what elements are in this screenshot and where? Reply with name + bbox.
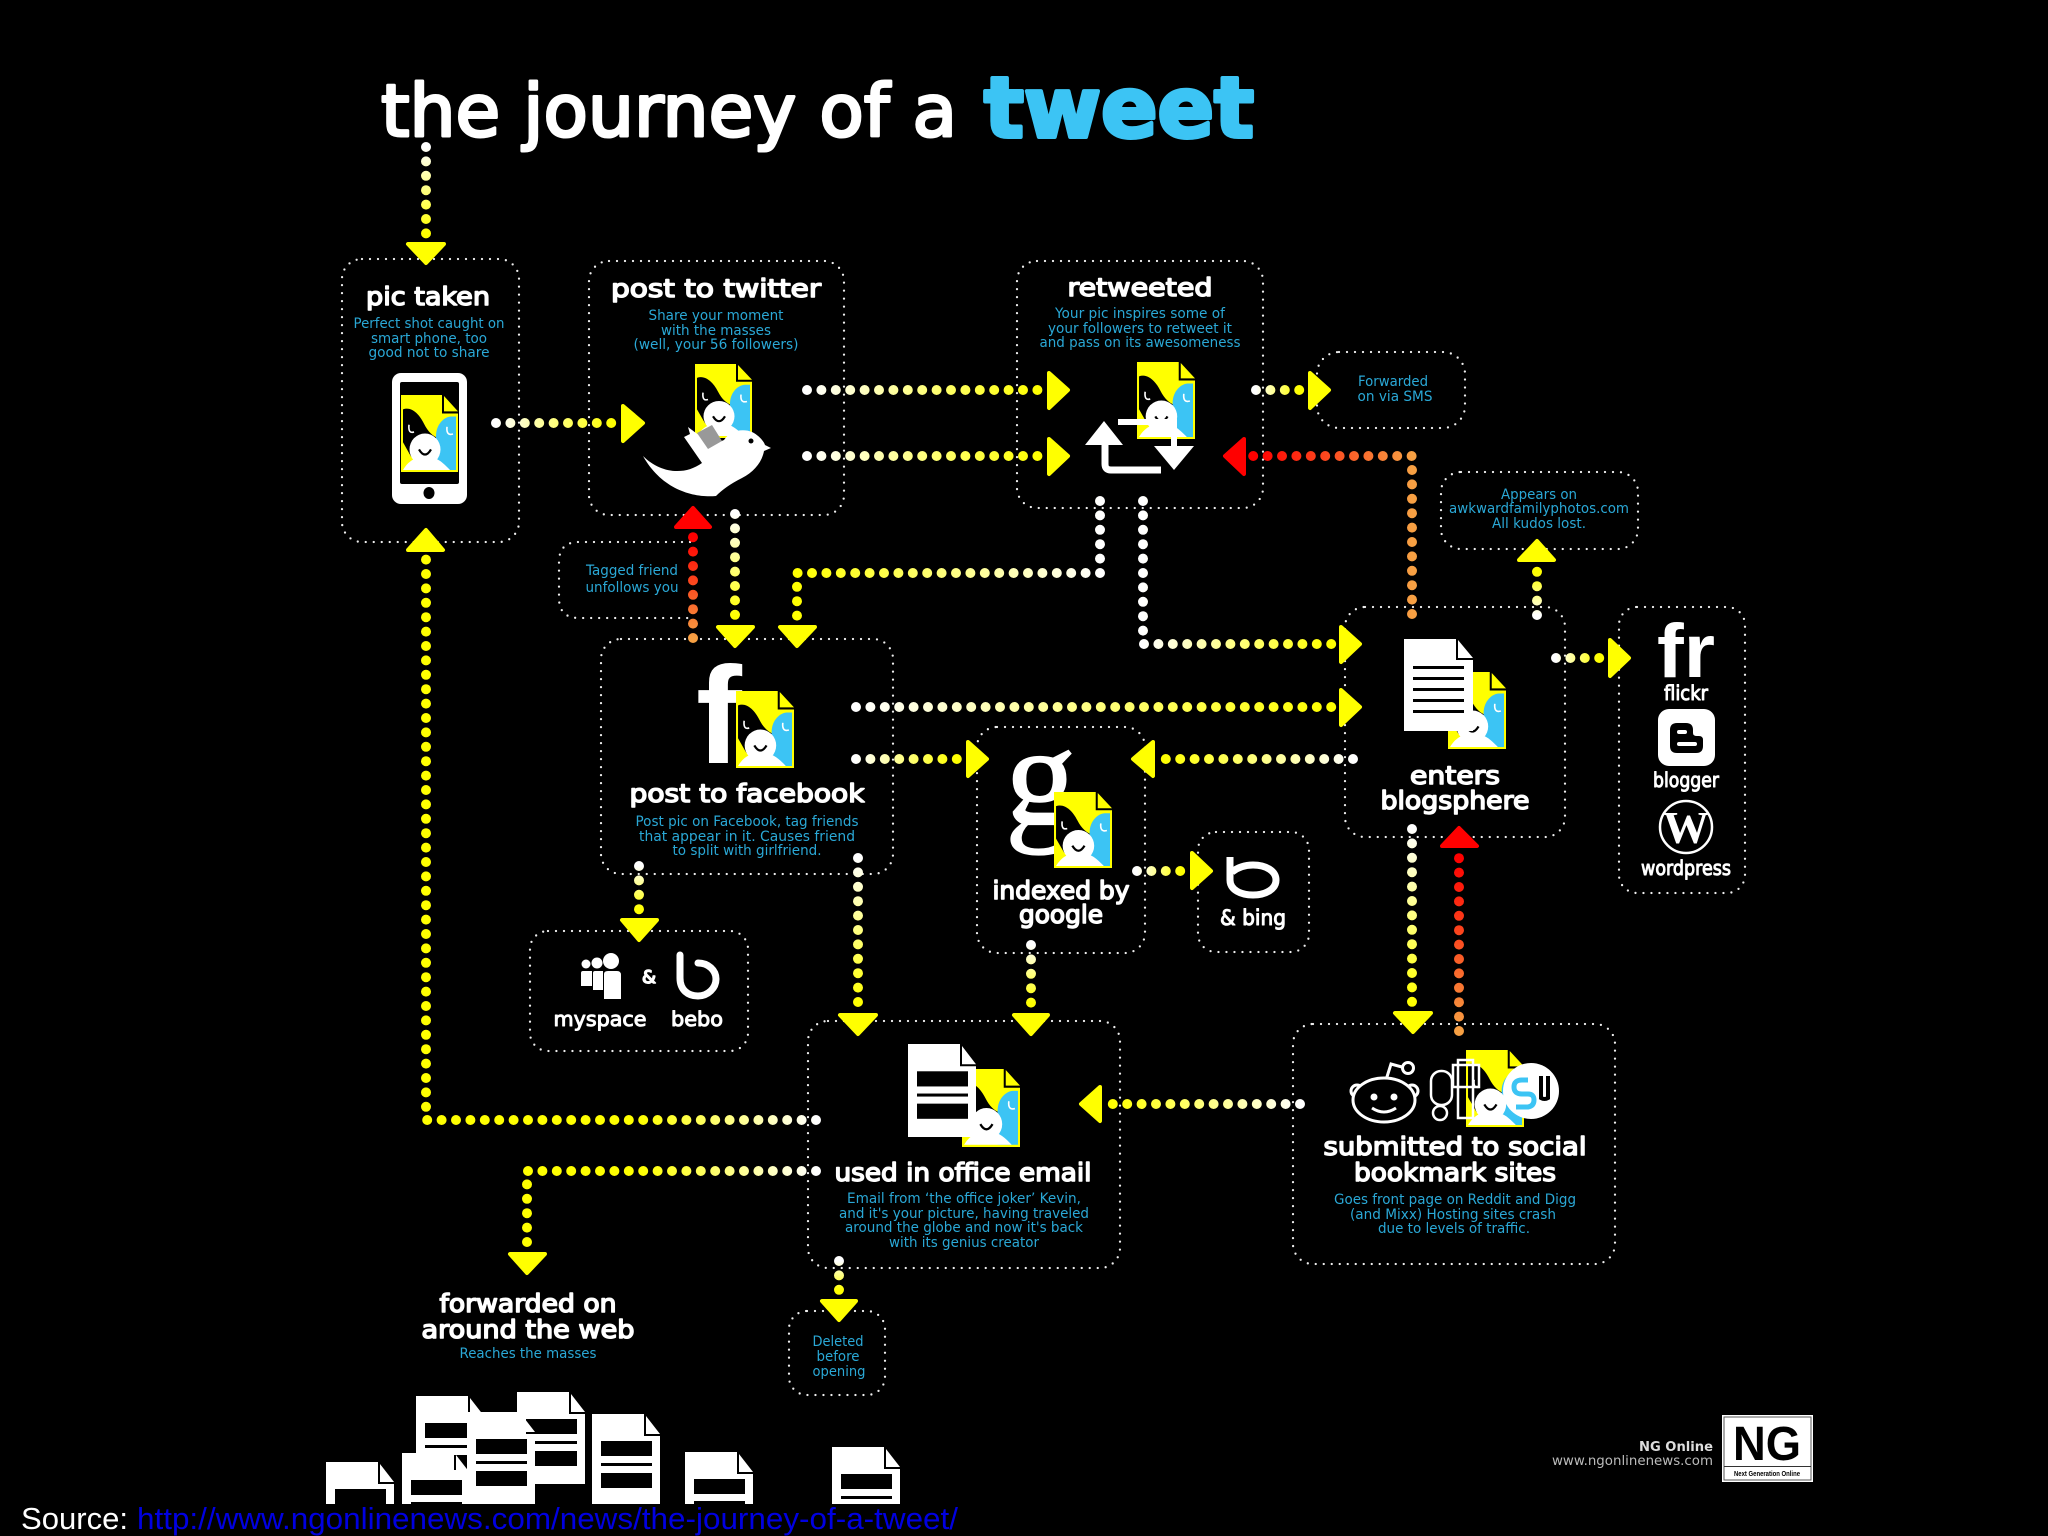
source line: http://www.ngonlinenews.com/news/the-journey-of-a-tweet/: [137, 1501, 958, 1536]
panel: retweeted: [1017, 261, 1263, 508]
text: retweeted description: your followers to retweet it: [1048, 321, 1232, 337]
panel: submitted to social bookmark sites: [1293, 1024, 1615, 1264]
text: email description: and it's your picture, having traveled: [839, 1206, 1089, 1222]
icon: bing b: [1230, 857, 1276, 895]
panel: indexed by google: google: [1019, 900, 1103, 929]
arrow: title to pic taken: [408, 147, 444, 263]
arrow: twitter to facebook: [718, 514, 753, 646]
icon: blog page: [1404, 639, 1473, 731]
text: post to facebook description: that appear in it. Causes friend: [639, 829, 855, 845]
panel: indexed by google: [977, 697, 1145, 953]
icon: picture document: [1466, 1050, 1524, 1127]
panel: bing: & bing: [1220, 906, 1286, 930]
arrow: twitter to retweeted top: [807, 373, 1068, 408]
text: email description: [839, 1191, 1089, 1251]
icon: digg and mixx: [1431, 1060, 1479, 1120]
text: pic taken description: good not to share: [368, 345, 490, 361]
logo: NG Online: www.ngonlinenews.com: [1552, 1454, 1713, 1469]
text: retweeted description: Your pic inspires some of: [1054, 306, 1226, 322]
icon: bebo b: [680, 955, 716, 996]
panel: retweeted: retweeted: [1068, 273, 1212, 302]
callout: forwarded on via SMS: [1317, 352, 1465, 428]
text: pic taken description: [354, 316, 504, 361]
arrow: facebook to blogsphere: [856, 690, 1360, 725]
arrow: blogsphere to awkwardfamilyphotos: [1519, 541, 1554, 615]
icon: wordpress: [1641, 801, 1731, 880]
callout: deleted before opening: Deleted: [812, 1334, 864, 1350]
panel: post to facebook: [601, 639, 893, 874]
icon: google g: g: [1005, 697, 1076, 855]
panel: myspace and bebo: [530, 931, 748, 1051]
icon: facebook f: f: [696, 639, 743, 793]
callout: forwarded on via SMS: on via SMS: [1358, 389, 1432, 405]
logo: NG Online: Next Generation Online: [1734, 1469, 1800, 1478]
panel: used in office email: [808, 1021, 1120, 1268]
panel: myspace and bebo: myspace: [554, 1007, 646, 1031]
text: email description: with its genius creator: [889, 1235, 1039, 1251]
callout: appears on awkwardfamilyphotos: Appears on: [1501, 487, 1577, 503]
arrow: blogsphere to social: [1395, 829, 1431, 1032]
arrow: email to deleted: [822, 1261, 856, 1320]
icon: pile of forwarded pages: [326, 1392, 900, 1504]
text: post to twitter description: Share your moment: [648, 308, 784, 324]
panel: used in office email: used in office email: [834, 1158, 1092, 1187]
arrow: blogsphere to retweeted: [1225, 439, 1412, 614]
arrow: retweeted to facebook: [780, 501, 1100, 646]
callout: tagged friend unfollows you: unfollows you: [586, 580, 678, 596]
text block: forwarded on around the web: Reaches the masses: [460, 1346, 596, 1362]
source line: Source:: [21, 1501, 128, 1536]
icon: reddit: [1351, 1062, 1418, 1122]
icon: picture document: [962, 1069, 1020, 1147]
text: post to twitter description: [634, 308, 798, 353]
arrow: blogsphere to flickr: [1556, 640, 1629, 676]
panel: myspace and bebo: bebo: [671, 1007, 723, 1031]
text: social description: Goes front page on Reddit and Digg: [1334, 1192, 1576, 1208]
arrow: facebook to twitter, unfollow: [676, 508, 710, 638]
arrow: facebook to google: [856, 742, 987, 776]
callout: appears on awkwardfamilyphotos: All kudos lost.: [1492, 516, 1586, 532]
arrow: google to bing: [1137, 853, 1211, 888]
text: post to facebook description: Post pic on Facebook, tag friends: [636, 814, 858, 830]
icon: picture document: [1448, 672, 1506, 749]
panel: post to facebook: post to facebook: [630, 779, 865, 808]
text: email description: around the globe and now it's back: [845, 1220, 1084, 1236]
panel: pic taken: pic taken: [366, 282, 490, 311]
arrow: facebook to email: [840, 858, 876, 1034]
text: post to twitter description: with the masses: [661, 323, 771, 339]
logo: NG Online: NG Online: [1639, 1440, 1713, 1455]
arrow: retweeted to SMS: [1256, 373, 1329, 408]
text block: forwarded on around the web: forwarded on: [440, 1289, 616, 1318]
text block: forwarded on around the web: [422, 1289, 634, 1362]
arrow: twitter to retweeted bottom: [807, 439, 1068, 474]
icon: email page: [908, 1044, 976, 1137]
icon: wordpress: wordpress: [1641, 856, 1731, 880]
text: pic taken description: Perfect shot caught on: [354, 316, 504, 332]
callout: deleted before opening: opening: [812, 1364, 866, 1380]
icon: picture document: [695, 364, 752, 438]
text: email description: Email from ‘the office joker’ Kevin,: [847, 1191, 1081, 1207]
callout: tagged friend unfollows you: Tagged friend: [585, 563, 678, 579]
icon: picture document: [1137, 362, 1195, 439]
panel: flickr, blogger, wordpress: [1619, 607, 1745, 893]
arrow: social to blogsphere: [1442, 828, 1477, 1031]
logo: NG Online: [1552, 1415, 1813, 1482]
icon: retweet arrows: [1085, 421, 1194, 470]
panel: indexed by google: indexed by: [992, 876, 1130, 905]
panel: submitted to social bookmark sites: bookmark sites: [1354, 1158, 1556, 1187]
text: social description: (and Mixx) Hosting sites crash: [1350, 1207, 1556, 1223]
panel: pic taken: [342, 259, 519, 542]
icon: smart phone with picture: [392, 373, 467, 504]
icon: myspace people: [581, 953, 621, 999]
arrow: google to email: [1014, 945, 1048, 1034]
panel: bing: [1198, 832, 1309, 952]
text: social description: due to levels of traffic.: [1378, 1221, 1530, 1237]
panel: post to twitter: [589, 261, 844, 515]
panel: submitted to social bookmark sites: submitted to social: [1324, 1132, 1586, 1161]
title: [381, 59, 1254, 157]
arrow: blogsphere to google: [1133, 742, 1353, 776]
text block: forwarded on around the web: around the web: [422, 1315, 634, 1344]
logo: NG Online: NG: [1733, 1418, 1801, 1471]
title: the journey of a: [381, 69, 957, 153]
panel: enters blogsphere: blogsphere: [1380, 786, 1530, 815]
callout: forwarded on via SMS: Forwarded: [1358, 374, 1428, 390]
icon: twitter bird: [643, 425, 771, 496]
arrow: social to email: [1081, 1087, 1300, 1121]
panel: enters blogsphere: enters: [1410, 761, 1500, 790]
arrow: email to forwarded on web: [510, 1171, 816, 1273]
arrow: email to pic taken: [408, 530, 816, 1120]
icon: picture document: [1054, 792, 1112, 868]
text: post to twitter description: (well, your 56 followers): [634, 337, 798, 353]
text: post to facebook description: [636, 814, 858, 859]
text: retweeted description: [1040, 306, 1240, 351]
callout: tagged friend unfollows you: [559, 542, 690, 618]
callout: appears on awkwardfamilyphotos: [1441, 472, 1638, 549]
panel: myspace and bebo: &: [642, 967, 656, 988]
arrow: retweeted to blogsphere: [1143, 501, 1360, 662]
text: retweeted description: and pass on its awesomeness: [1040, 335, 1240, 351]
callout: deleted before opening: [789, 1311, 885, 1395]
text: post to facebook description: to split with girlfriend.: [672, 843, 822, 859]
title: tweet: [984, 59, 1254, 157]
panel: enters blogsphere: [1345, 607, 1565, 837]
text: social description: [1334, 1192, 1576, 1237]
icon: wordpress: W: [1663, 802, 1709, 853]
icon: flickr: flickr: [1664, 681, 1709, 705]
arrow: pic taken to twitter: [496, 406, 643, 441]
icon: blogger: [1653, 709, 1720, 792]
icon: stumbleupon: [1503, 1063, 1559, 1119]
icon: flickr: fr: [1657, 609, 1715, 694]
icon: picture document: [736, 691, 794, 768]
callout: appears on awkwardfamilyphotos: awkwardfamilyphotos.com: [1449, 501, 1629, 517]
panel: post to twitter: post to twitter: [611, 274, 822, 303]
text: pic taken description: smart phone, too: [371, 331, 487, 347]
arrow: facebook to myspace: [622, 866, 657, 940]
callout: deleted before opening: before: [816, 1349, 860, 1365]
icon: blogger: blogger: [1653, 768, 1720, 792]
